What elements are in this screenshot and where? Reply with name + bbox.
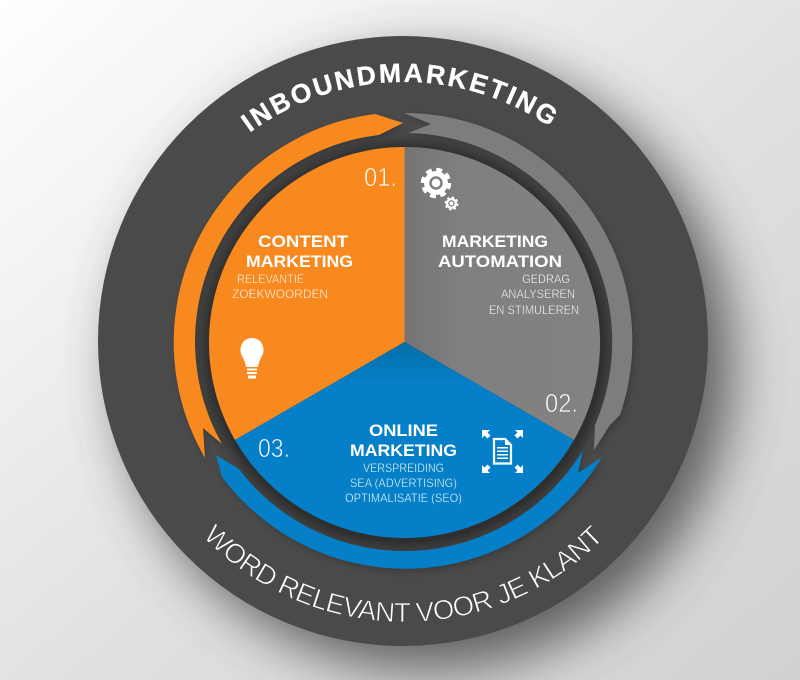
panel: online marketing xyxy=(235,342,574,538)
heading: online marketing xyxy=(350,422,457,460)
text: relevantie zoekwoorden: ZOEKWOORDEN xyxy=(232,287,328,301)
text: verspreiding sea optimalisatie xyxy=(345,461,462,505)
number 01: 01. xyxy=(364,162,397,192)
pie shadow xyxy=(202,142,608,548)
tagline: word relevant voor je klant: WORD RELEVANT VOOR JE KLANT xyxy=(207,524,599,622)
icon: light bulb xyxy=(240,338,264,378)
grey slice xyxy=(404,147,600,440)
panel: marketing automation xyxy=(404,147,600,440)
arrow: blue xyxy=(216,450,602,569)
heading: marketing automation: MARKETING xyxy=(442,233,548,251)
heading: marketing automation: AUTOMATION xyxy=(438,253,562,271)
heading: online marketing: ONLINE xyxy=(369,422,438,440)
arrow: grey xyxy=(404,113,632,450)
heading: content marketing: CONTENT xyxy=(258,233,348,251)
text: gedrag analyseren en stimuleren: GEDRAG xyxy=(522,272,570,286)
heading: content marketing: MARKETING xyxy=(246,253,353,271)
heading: marketing automation xyxy=(438,233,562,271)
number 03: 03. xyxy=(258,433,290,463)
number 02: 02. xyxy=(545,388,578,418)
panel: content marketing xyxy=(209,147,404,440)
text: gedrag analyseren en stimuleren: EN STIMULEREN xyxy=(489,303,579,317)
heading: online marketing: MARKETING xyxy=(350,442,457,460)
text: relevantie zoekwoorden: RELEVANTIE xyxy=(237,272,304,286)
heading: content marketing xyxy=(246,233,353,271)
text: verspreiding sea optimalisatie: OPTIMALISATIE (SEO) xyxy=(345,491,462,505)
text: relevantie zoekwoorden xyxy=(232,272,328,301)
blue slice xyxy=(235,342,574,538)
icon: gears xyxy=(422,170,458,210)
arrow shadows xyxy=(176,116,634,572)
arrow: orange xyxy=(174,114,403,458)
outer dark circle xyxy=(98,36,708,646)
icon: document with arrows xyxy=(482,430,523,473)
text: verspreiding sea optimalisatie: VERSPREIDING xyxy=(363,461,444,475)
heading: inboundmarketing: INBOUNDMARKETING xyxy=(240,64,556,132)
text: gedrag analyseren en stimuleren: ANALYSEREN xyxy=(501,287,575,301)
text: gedrag analyseren en stimuleren xyxy=(489,272,579,317)
orange slice xyxy=(209,147,404,440)
circle shadow xyxy=(120,58,732,670)
text: verspreiding sea optimalisatie: SEA (ADVERTISING) xyxy=(350,476,457,490)
